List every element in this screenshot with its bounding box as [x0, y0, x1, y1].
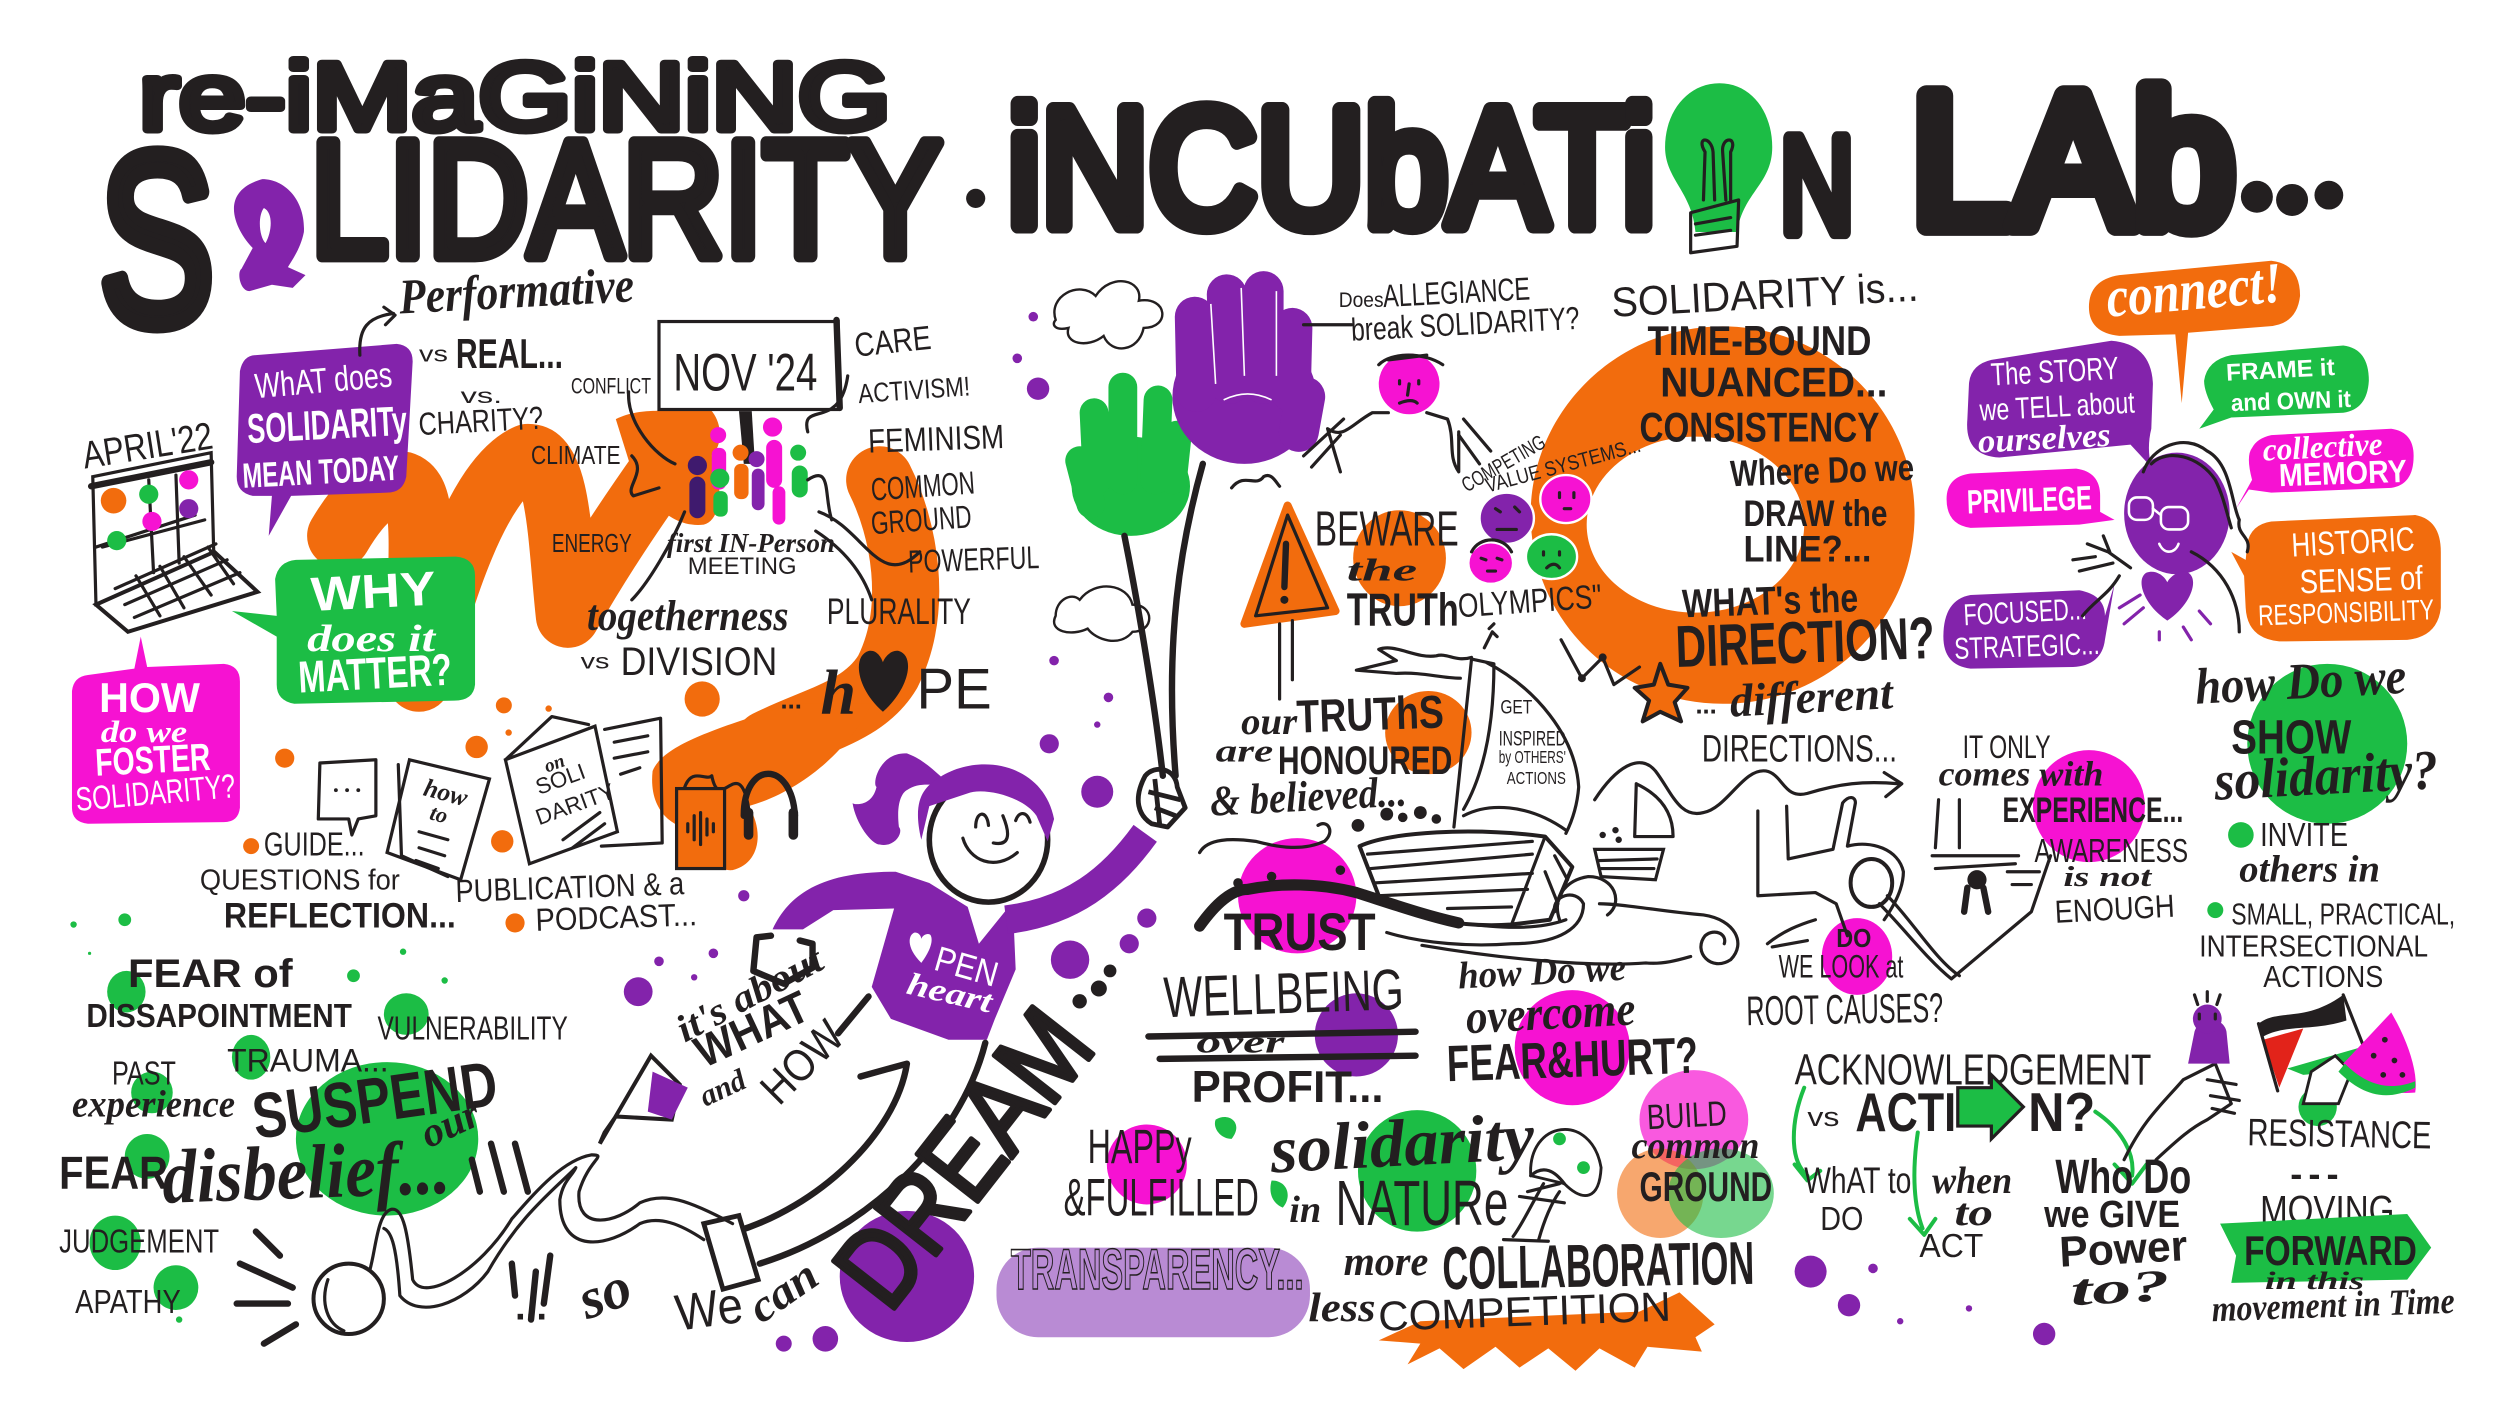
text: plurality hope: PLURALITY: [827, 591, 971, 632]
panel: moving forward: MOVING: [2260, 1189, 2394, 1233]
bubble: what does solidarity mean today: SOLIDARITy: [246, 397, 408, 452]
text: more collaboration less competition: COLLABORATION: [1442, 1229, 1755, 1302]
text: does allegiance break solidarity: [1304, 270, 1580, 348]
illustration: boats and waves: [1200, 624, 1902, 964]
bubble: why does it matter: MATTER?: [297, 645, 453, 703]
figure: worried person with angel and devil: [1232, 354, 1491, 488]
title: [99, 44, 2343, 375]
icon: light bulb: [1665, 83, 1772, 253]
text: directions: DIRECTIONS...: [1702, 727, 1897, 770]
text: it's about what and how: HOW: [751, 1010, 854, 1114]
labels around the meeting: ACTIVISM!: [857, 370, 971, 409]
text: what to do, when to act: ACT: [1919, 1228, 1983, 1265]
text: how do we overcome fear and hurt: FEAR&HURT?: [1446, 1027, 1699, 1092]
text: it's about what and how: [669, 938, 854, 1114]
labels around the meeting: CARE: [853, 320, 933, 365]
text: transparency: TRANSPARENCY...: [1011, 1238, 1304, 1302]
text: our truths are honoured: are: [1216, 733, 1273, 768]
text: our truths are honoured: TRUThS: [1296, 685, 1445, 743]
text: so we can dream: DREAM: [810, 985, 1117, 1330]
labels: guide, questions, publication, podcast: QUESTIONS for: [200, 864, 400, 896]
bubble: frame it and own it: [2199, 346, 2369, 429]
text: more collaboration less competition: less: [1308, 1284, 1376, 1330]
ponytail: [853, 753, 944, 845]
raised fist: [1138, 769, 1185, 827]
text: togetherness vs division: [581, 593, 789, 684]
hull: [1360, 832, 1572, 925]
bubble: what does solidarity mean today: WhAT does: [253, 355, 394, 406]
colour blobs behind text: [90, 510, 2407, 1342]
labels around the meeting: GROUND: [870, 498, 973, 541]
text: solidarity in nature: NATURe: [1336, 1167, 1508, 1239]
icons: guide, how-to, publication, podcast: on: [542, 751, 568, 777]
text: acknowledgement vs action: N?: [2028, 1082, 2095, 1143]
decorative dots: [70, 312, 2055, 1352]
text: how do we overcome fear and hurt: overcome: [1465, 982, 1637, 1044]
bubble: what does solidarity mean today: [237, 344, 413, 536]
legs: [736, 997, 985, 1264]
text: togetherness vs division: togetherness: [587, 593, 789, 640]
text: resistance: RESISTANCE: [2247, 1111, 2432, 1157]
back arm: [600, 1056, 680, 1144]
wavy arrow: [1595, 763, 1902, 814]
text: sail: ACTIONS: [1507, 768, 1566, 788]
text: solidarity in nature: in: [1289, 1189, 1321, 1231]
title S: S: [99, 103, 214, 375]
text: togetherness vs division: vs: [581, 651, 609, 674]
bubble: focused strategic: FOCUSED...: [1963, 592, 2088, 632]
panel: moving forward: in this: [2265, 1266, 2364, 1295]
text: fears list: experience: [72, 1083, 235, 1125]
text: performative vs real vs charity: [360, 257, 635, 442]
text: suspend our disbelief: SUSPEND: [248, 1047, 502, 1153]
background shape: orange squiggle: [339, 400, 906, 870]
labels around the meeting: [531, 320, 1040, 600]
bubble: connect: connect!: [2104, 252, 2285, 330]
text: so we can dream: We: [672, 1276, 746, 1342]
text: how do we show solidarity: [2194, 648, 2455, 994]
text: how do we show solidarity: INVITE: [2260, 817, 2348, 854]
bubble: why does it matter: does it: [307, 618, 437, 660]
text: directions: different: [1729, 668, 1896, 728]
text: plurality hope: ...: [781, 687, 802, 715]
text: solidarity is: NUANCED...: [1660, 359, 1887, 406]
hair: [918, 764, 1054, 841]
text: what to do, when to act: [1804, 1160, 2012, 1265]
bubble: collective memory: MEMORY: [2278, 453, 2407, 493]
text: beware the truth olympics: the: [1347, 553, 1417, 588]
text: wellbeing over profit: [1148, 958, 1416, 1112]
text: does allegiance break solidarity: ALLEGIANCE: [1382, 270, 1531, 314]
bubble: how do we foster solidarity: HOW: [99, 674, 201, 721]
text: solidarity is: Where Do we: [1729, 447, 1915, 494]
labels: guide, questions, publication, podcast: PODCAST...: [535, 896, 698, 938]
icon: faces: [1468, 475, 1591, 584]
bubble: the story we tell about ourselves: The STORY: [1990, 350, 2120, 392]
bubble: frame it and own it: FRAME it: [2225, 354, 2335, 387]
text: how do we show solidarity: INTERSECTIONAL: [2199, 930, 2428, 964]
text: sail: INSPIRED: [1499, 727, 1566, 750]
background shape: orange ring: [1531, 326, 1915, 704]
text: solidarity is: DRAW the: [1743, 493, 1887, 534]
text: wellbeing over profit: over: [1196, 1024, 1285, 1059]
small boat: [1595, 849, 1663, 880]
title n: N: [1780, 109, 1854, 261]
green arrows: [1794, 1088, 2147, 1235]
text: fears list: TRAUMA...: [227, 1043, 389, 1079]
bubble: focused strategic: STRATEGIC...: [1954, 627, 2100, 666]
text: do we look at root causes: WE LOOK at: [1779, 948, 1903, 984]
text: sail: by OTHERS': [1499, 747, 1566, 767]
icon: green arrow: [1958, 1075, 2023, 1139]
title dot: [966, 189, 985, 208]
figure: running woman: heart: [904, 966, 997, 1020]
text: it's about what and how: it's about: [669, 938, 831, 1051]
shape: orange zigzag: [1379, 1292, 1715, 1371]
text: fears list: FEAR: [59, 1146, 168, 1198]
text: competing value systems: COMPETING: [1458, 431, 1550, 497]
bubble: collective memory: [2236, 426, 2414, 509]
icons: guide, how-to, publication, podcast: [318, 717, 798, 880]
bubble: how do we foster solidarity: do we: [101, 715, 187, 749]
panel: moving forward: ...: [2287, 1154, 2342, 1186]
bubble: historic sense of responsibility: RESPONSIBILITY: [2258, 594, 2435, 632]
illustration: hand and falling figure: [1758, 798, 2051, 979]
text: fears list: PAST: [112, 1055, 176, 1092]
text: how do we overcome fear and hurt: [1446, 947, 1699, 1092]
text: directions: ...: [1695, 691, 1717, 719]
bubble: historic sense of responsibility: HISTORIC: [2291, 521, 2415, 565]
balloon strings: [1124, 464, 1203, 776]
text: our truths are honoured: [1209, 685, 1452, 826]
bubble: frame it and own it: and OWN it: [2231, 386, 2351, 417]
icon: green hand balloon: [1072, 387, 1190, 536]
title ellipsis: [2241, 181, 2343, 216]
text: so we can dream: can: [738, 1249, 827, 1333]
icon: purple hand balloon: [1172, 288, 1316, 464]
text: build common ground: [1631, 1094, 1772, 1210]
text: build common ground: common: [1631, 1125, 1759, 1167]
icon: palestinian flag: [2258, 995, 2370, 1104]
text: does allegiance break solidarity: break SOLIDARITY?: [1350, 300, 1580, 348]
text: acknowledgement vs action: [1795, 1046, 2151, 1143]
icon: warning triangle: [1244, 505, 1336, 699]
text: sail: [1499, 697, 1566, 788]
bubble: how do we foster solidarity: FOSTER: [94, 736, 211, 785]
text: suspend our disbelief: our: [413, 1089, 488, 1157]
labels around the meeting: POWERFUL: [907, 539, 1040, 580]
text: acknowledgement vs action: vs: [1807, 1104, 1839, 1132]
text: sail: GET: [1500, 697, 1533, 718]
text: performative vs real vs charity: CHARITY?: [418, 400, 544, 442]
text: happy and fulfilled: [1064, 1121, 1259, 1228]
bubble: focused strategic: [1943, 584, 2115, 669]
bubble: the story we tell about ourselves: ourselves: [1977, 417, 2112, 461]
panel: moving forward: FORWARD: [2244, 1227, 2417, 1274]
sweater: [773, 872, 1016, 1040]
thick wave: [1200, 885, 1459, 926]
text: more collaboration less competition: more: [1344, 1238, 1428, 1284]
panel: moving forward: movement in Time: [2211, 1280, 2455, 1329]
text: what to do, when to act: WhAT to: [1804, 1160, 1911, 1201]
text: plurality hope: h: [821, 656, 856, 727]
icon: hand with purple figure: [2124, 992, 2239, 1160]
text: performative vs real vs charity: Performative: [397, 257, 635, 325]
text: directions: [1561, 640, 1897, 770]
title solidarity: LIDARITY: [310, 107, 942, 291]
arrow banner: [2220, 1214, 2431, 1283]
people on deck: [1233, 806, 1441, 888]
text: so we can dream: so: [569, 1255, 640, 1332]
text: beware the truth olympics: OLYMPICS": [1457, 578, 1603, 625]
bubble: the story we tell about ourselves: [1967, 341, 2153, 467]
text: fears list: VULNERABILITY: [377, 1011, 568, 1048]
text: solidarity is: SOLIDARITY is...: [1610, 263, 1919, 326]
labels around the meeting: COMMON: [870, 464, 976, 508]
text: do we look at root causes: DO: [1836, 925, 1871, 953]
labels around the meeting: CONFLICT: [571, 373, 651, 398]
text: how do we show solidarity: ACTIONS: [2263, 960, 2383, 994]
text: who do we give power to: Who Do: [2055, 1151, 2191, 1204]
text: it's about what and how: WHAT: [687, 982, 817, 1078]
bubble: the story we tell about ourselves: we TELL about: [1978, 386, 2136, 428]
text: does allegiance break solidarity: Does: [1339, 289, 1384, 312]
group of small people: [688, 417, 808, 525]
text: solidarity in nature: solidarity: [1267, 1099, 1536, 1187]
text: more collaboration less competition: [1308, 1229, 1755, 1340]
text: how do we show solidarity: SHOW: [2231, 711, 2352, 764]
bubble: how do we foster solidarity: SOLIDARITY?: [74, 768, 237, 819]
icon: watermelon: [2338, 1013, 2416, 1095]
text: suspend our disbelief: [161, 1047, 502, 1220]
labels: guide, questions, publication, podcast: REFLECTION...: [224, 897, 456, 936]
text: fears list: JUDGEMENT: [59, 1223, 219, 1260]
text: performative vs real vs charity: vs.: [461, 385, 502, 408]
text: how do we show solidarity: solidarity?: [2212, 739, 2440, 813]
text: beware the truth olympics: BEWARE: [1315, 500, 1459, 556]
text: acknowledgement vs action: ACKNOWLEDGEMENT: [1795, 1046, 2151, 1094]
text: it only comes with experience: is not: [2063, 861, 2153, 893]
text: fears list: FEAR of: [128, 952, 293, 996]
icons: guide, how-to, publication, podcast: DARITY: [532, 778, 618, 830]
text: beware the truth olympics: TRUTh: [1347, 583, 1459, 635]
text: who do we give power to: [2043, 1151, 2191, 1315]
text: it only comes with experience: comes with: [1939, 754, 2103, 793]
sign: Nov 24: NOV '24: [673, 343, 817, 402]
lower hand: [753, 936, 813, 984]
text: what to do, when to act: to: [1955, 1192, 1993, 1234]
icon: purple ribbon: [234, 179, 306, 291]
figure: person with glasses and heart: [2073, 443, 2248, 640]
icon: clouds: [1054, 281, 1162, 641]
figure: running woman: PEN: [930, 940, 1003, 995]
text: plurality hope: PE: [917, 658, 992, 722]
flag: [1356, 648, 1472, 678]
text: do we look at root causes: [1746, 925, 1944, 1034]
text: happy and fulfilled: &FULFILLED: [1064, 1169, 1259, 1228]
text: togetherness vs division: DIVISION: [621, 640, 777, 684]
text: who do we give power to: we GIVE: [2043, 1193, 2180, 1236]
text: fears list: [59, 952, 568, 1321]
text: fears list: DISSAPOINTMENT: [86, 998, 352, 1035]
text: performative vs real vs charity: vs: [419, 342, 448, 367]
bubble: what does solidarity mean today: MEAN TODAY: [241, 449, 400, 496]
icons: guide, how-to, publication, podcast: SOLI: [532, 759, 589, 800]
text: so we can dream: [515, 965, 1117, 1342]
text: happy and fulfilled: HAPPy: [1088, 1121, 1192, 1174]
icon: mushroom: [1504, 1129, 1601, 1241]
text: what to do, when to act: DO: [1820, 1201, 1863, 1238]
text: more collaboration less competition: COMPETITION: [1377, 1283, 1672, 1340]
text: our truths are honoured: & believed...: [1209, 769, 1408, 826]
bubble: historic sense of responsibility: [2231, 515, 2441, 641]
icons: guide, how-to, publication, podcast: to: [427, 800, 451, 828]
sail: [1454, 659, 1579, 833]
labels: guide, questions, publication, podcast: [200, 827, 698, 938]
text: it only comes with experience: ENOUGH: [2054, 888, 2176, 930]
figure: running woman: [237, 753, 1185, 1344]
text: it only comes with experience: AWARENESS: [2035, 833, 2188, 870]
text: it only comes with experience: [1939, 729, 2188, 930]
text: what to do, when to act: when: [1932, 1160, 2012, 1202]
labels: guide, questions, publication, podcast: PUBLICATION & a: [455, 865, 685, 909]
face: [963, 814, 1030, 862]
text: our truths are honoured: our: [1241, 701, 1298, 743]
text: solidarity is: TIME-BOUND: [1647, 317, 1871, 364]
text: wellbeing over profit: WELLBEING: [1163, 958, 1405, 1030]
labels around the meeting: first IN-Person: [667, 528, 835, 558]
icon: laptop with April 22 label: APRIL'22: [79, 415, 216, 478]
text: fears list: APATHY: [75, 1284, 181, 1321]
labels: guide, questions, publication, podcast: GUIDE...: [264, 827, 365, 864]
text: do we look at root causes: ROOT CAUSES?: [1746, 984, 1944, 1034]
text: solidarity is: WHAT's the: [1681, 576, 1859, 626]
title incubation: iNCUbATi: [1008, 74, 1655, 262]
title lab: LAb: [1911, 55, 2234, 266]
text: suspend our disbelief: disbelief...: [161, 1125, 451, 1220]
text: how do we show solidarity: how Do we: [2194, 648, 2408, 716]
text: performative vs real vs charity: REAL...: [456, 330, 563, 377]
bubble: privilege: PRIVILEGE: [1966, 480, 2092, 521]
text: solidarity is: CONSISTENCY: [1639, 403, 1880, 450]
text: acknowledgement vs action: ACTI: [1855, 1082, 1956, 1143]
panel: moving forward: [2211, 1154, 2455, 1329]
labels around the meeting: CLIMATE: [531, 442, 621, 470]
text: it only comes with experience: EXPERIENCE...: [2003, 791, 2183, 830]
raised sleeve: [1006, 833, 1145, 920]
text: it's about what and how: and: [694, 1062, 752, 1113]
sweater lettering: [910, 933, 932, 963]
title line 1: re-iMaGiNiNG: [139, 44, 891, 151]
text: our truths are honoured: HONOURED: [1278, 739, 1452, 783]
text: solidarity in nature: [1215, 1099, 1536, 1239]
text: build common ground: GROUND: [1639, 1163, 1772, 1210]
text: solidarity is: [1610, 263, 1936, 680]
head: [929, 777, 1048, 902]
labels around the meeting: MEETING: [688, 553, 797, 580]
labels around the meeting: ENERGY: [552, 530, 632, 558]
text: who do we give power to: to?: [2069, 1260, 2171, 1315]
text: build common ground: BUILD: [1646, 1094, 1728, 1137]
text: solidarity is: DIRECTION?: [1674, 604, 1936, 680]
icon: laptop with April 22 label: [79, 415, 258, 632]
text: who do we give power to: Power: [2058, 1222, 2189, 1277]
text: plurality hope: [781, 591, 992, 727]
text: solidarity is: LINE?...: [1743, 528, 1871, 569]
bubble: why does it matter: [232, 557, 475, 704]
bubble: collective memory: collective: [2262, 426, 2383, 468]
bubble: connect: [2089, 252, 2300, 403]
bubble: historic sense of responsibility: SENSE of: [2299, 560, 2424, 601]
text: how do we overcome fear and hurt: how Do we: [1457, 947, 1627, 997]
bubble: why does it matter: WHY: [310, 563, 437, 622]
text: how do we show solidarity: others in: [2239, 848, 2380, 890]
motion lines: [237, 1144, 550, 1344]
text: competing value systems: VALUE SYSTEMS...: [1483, 434, 1643, 497]
text: trust: TRUST: [1224, 903, 1376, 962]
text: beware the truth olympics: [1315, 500, 1603, 635]
labels around the meeting: FEMINISM: [868, 419, 1005, 461]
text: so we can dream: ...: [515, 1286, 547, 1329]
bubble: privilege: [1947, 469, 2115, 528]
icons: guide, how-to, publication, podcast: how: [421, 773, 472, 812]
text: it only comes with experience: IT ONLY: [1963, 729, 2051, 765]
bubble: how do we foster solidarity: [72, 637, 240, 824]
sign: Nov 24: [659, 320, 840, 464]
text: wellbeing over profit: PROFIT...: [1192, 1062, 1384, 1112]
